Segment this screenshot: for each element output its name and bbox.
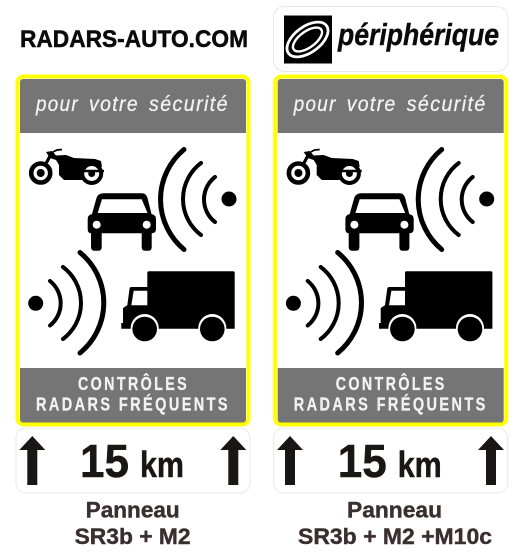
panel: right sign SR3b (275, 76, 506, 424)
title: RADARS-AUTO.COM: RADARS-AUTO.COM (20, 26, 248, 53)
heading: pour votre sécurité: sécurité (149, 93, 229, 116)
distance: 15 km: 15 (338, 435, 387, 487)
text: CONTRÔLES: CONTRÔLES (336, 373, 447, 394)
arrow: left up (19, 436, 45, 485)
bottom grey band (278, 368, 504, 423)
panel: périphérique M10c (274, 6, 508, 72)
icon: motorcycle (289, 150, 362, 183)
arrow: right up (478, 436, 504, 485)
icon: radar waves lower (28, 252, 104, 353)
périphérique label: périphérique (337, 17, 499, 52)
top grey band (278, 79, 504, 133)
text: CONTRÔLES: CONTRÔLES (78, 373, 189, 394)
icon: motorcycle (31, 150, 104, 183)
icon: truck (121, 271, 235, 342)
panel: left sign SR3b (18, 76, 248, 424)
caption: right panel: Panneau (347, 498, 442, 522)
panel: left distance plate M2 (16, 428, 250, 493)
caption: right panel: SR3b + M2 +M10c (298, 524, 492, 549)
top grey band (20, 79, 246, 133)
icon: truck (379, 271, 492, 342)
icon: car (88, 193, 156, 251)
text: RADARS FRÉQUENTS: RADARS FRÉQUENTS (294, 394, 488, 415)
icon: radar waves upper (161, 150, 236, 250)
arrow: left up (277, 436, 303, 485)
distance: 15 km: km (398, 444, 442, 485)
bottom grey band (20, 368, 246, 423)
text: RADARS FRÉQUENTS: RADARS FRÉQUENTS (36, 394, 230, 415)
panel: right distance plate M2 (274, 428, 508, 493)
heading: pour votre sécurité: votre (347, 93, 397, 116)
distance: 15 km: km (140, 444, 184, 485)
arrow: right up (220, 436, 246, 485)
caption: left panel: Panneau (86, 498, 180, 522)
heading: pour votre sécurité: sécurité (407, 93, 487, 116)
heading: pour votre sécurité: votre (89, 93, 139, 116)
distance: 15 km: 15 (80, 435, 129, 487)
icon: radar waves lower (286, 252, 361, 353)
icon: radar waves upper (418, 150, 494, 250)
icon: car (345, 193, 414, 251)
heading: pour votre sécurité: pour (35, 93, 79, 116)
icon: périphérique ring logo (281, 15, 334, 64)
heading: pour votre sécurité: pour (293, 93, 337, 116)
caption: left panel: SR3b + M2 (75, 524, 191, 549)
